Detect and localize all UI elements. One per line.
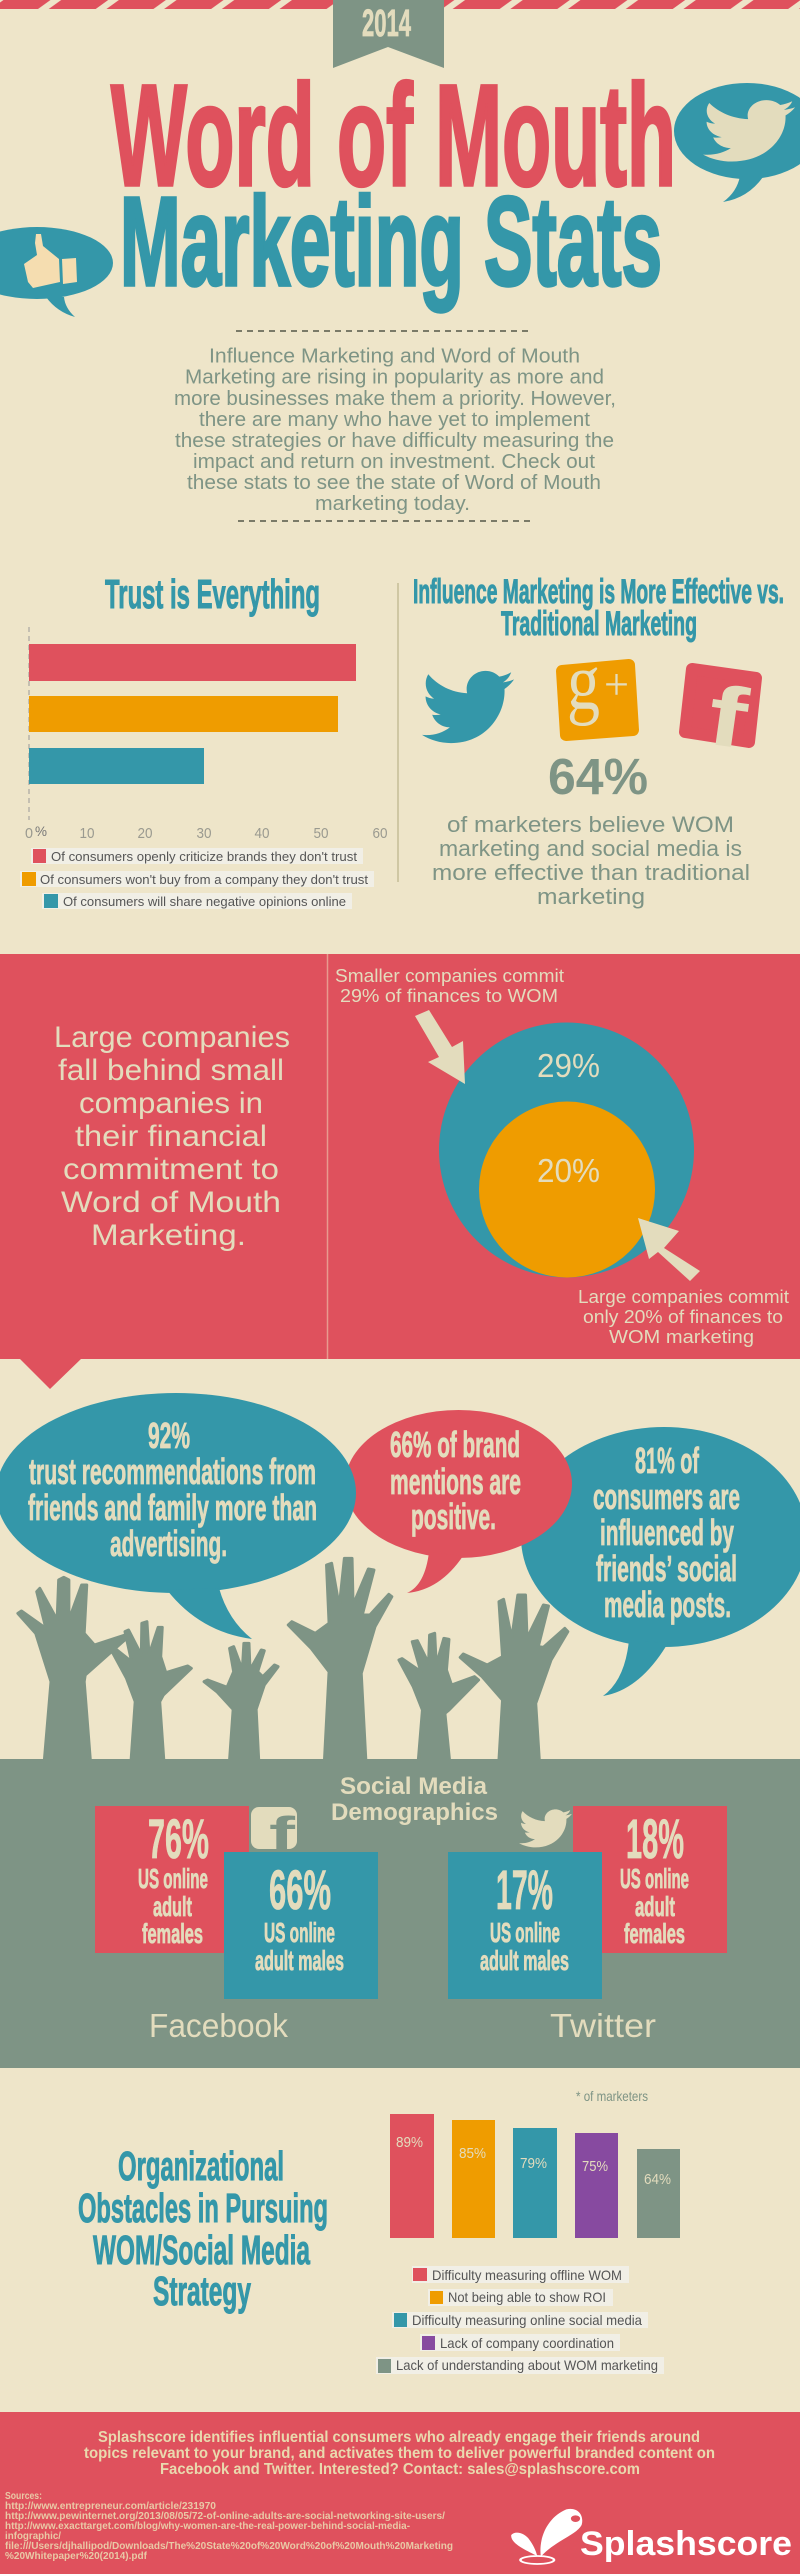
heading: organizational obstacles: Organizational (118, 2143, 284, 2189)
speech bubble: 92%: trust recommendations from (29, 1451, 316, 1492)
speech bubble: 92%: friends and family more than (28, 1487, 317, 1528)
heading: organizational obstacles: Strategy (153, 2268, 251, 2314)
year ribbon (333, 0, 444, 68)
text block: marketers believe: of marketers believe WOM (447, 812, 734, 837)
text block: marketers believe: marketing (537, 884, 645, 909)
stat: 64%: 64% (548, 748, 648, 805)
label: facebook: Facebook (149, 2007, 288, 2044)
panel: social media demographics (0, 1759, 800, 2068)
callout: smaller companies: 29% of finances to WOM (340, 986, 558, 1006)
icon: google plus: + (604, 660, 629, 709)
icon: facebook small (251, 1807, 297, 1859)
speech bubble: 66%: positive. (411, 1496, 496, 1537)
card: twitter females: adult (635, 1891, 675, 1922)
text: splashscore pitch (84, 2429, 715, 2478)
card: facebook females: females (142, 1918, 203, 1949)
arrow: to large circle (638, 1218, 700, 1281)
intro text block: more businesses make them a priority. However, (174, 388, 616, 410)
speech bubble: 66%: 66% of brand (390, 1424, 520, 1465)
chart: nested circles: 20% (537, 1152, 600, 1189)
legend: obstacles: Difficulty measuring offline WOM (432, 2267, 622, 2283)
icon: twitter speech bubble (674, 83, 800, 202)
text: large companies: commitment to (63, 1153, 279, 1186)
bar chart: trust: 30 (196, 825, 212, 842)
bar chart: trust: 10 (80, 825, 94, 842)
intro text block: there are many who have yet to implement (199, 409, 590, 431)
icon: facebook: f (702, 668, 754, 768)
card: facebook females: adult (153, 1891, 192, 1922)
text: splashscore pitch: Facebook and Twitter. Interested? Contact: sales@splashscore.com (160, 2461, 640, 2478)
text: splashscore pitch: topics relevant to your brand, and activates them to deliver powerful branded content on (84, 2445, 715, 2462)
card: facebook males (224, 1852, 378, 1999)
intro text block: these strategies or have difficulty measuring the (175, 430, 614, 452)
intro text block: these stats to see the state of Word of Mouth (187, 472, 601, 494)
illustration: raised hands (18, 1558, 568, 1760)
heading: social media demographics (331, 1773, 498, 1826)
heading: organizational obstacles (78, 2143, 328, 2314)
logo: splashscore: Splashscore (580, 2525, 792, 2563)
text block: marketers believe: marketing and social media is (439, 836, 742, 861)
callout: large companies: only 20% of finances to (583, 1307, 783, 1327)
callout: large companies: WOM marketing (609, 1327, 754, 1347)
bar chart: trust: 40 (254, 825, 270, 842)
legend: trust: Of consumers openly criticize brands they don't trust (51, 849, 357, 864)
text: large companies: Large companies (54, 1021, 290, 1054)
bar chart: obstacles: 75% (582, 2158, 608, 2175)
bar chart: trust: 50 (314, 825, 328, 842)
callout: large companies (578, 1287, 789, 1347)
callout: smaller companies: Smaller companies commit (335, 966, 564, 986)
panel: financial commitment (0, 954, 800, 1389)
text block: marketers believe (432, 812, 750, 909)
legend: obstacles: Difficulty measuring online social media (412, 2312, 642, 2328)
card: twitter males: 17% (496, 1858, 553, 1921)
chart: nested circles (439, 1022, 694, 1278)
text: sources: Sources: (5, 2491, 42, 2502)
card: twitter males: US online (490, 1917, 560, 1948)
legend: trust: Of consumers will share negative opinions online (63, 894, 346, 909)
text block: marketers believe: more effective than traditional (432, 860, 750, 885)
icon: google plus (562, 639, 633, 735)
text: sources (5, 2491, 453, 2562)
text: sources: file:///Users/djhallipod/Downloads/The%20State%20of%20Word%20of%20Mouth%20Marketing (5, 2541, 453, 2552)
bar chart: obstacles (390, 2114, 680, 2238)
speech bubble: 81% (521, 1427, 800, 1696)
speech bubble: 92% (0, 1393, 356, 1639)
bar chart: trust: 60 (372, 825, 388, 842)
speech bubble: 92%: 92% (148, 1415, 190, 1456)
card: twitter males (448, 1852, 602, 1999)
text: large companies: fall behind small (58, 1054, 284, 1087)
bar chart: trust (25, 627, 388, 842)
icon: thumbs-up speech bubble (0, 227, 113, 317)
intro text block (174, 346, 616, 515)
card: facebook males: adult males (255, 1945, 344, 1976)
note: of marketers: * of marketers (576, 2088, 648, 2104)
text: large companies: Marketing. (91, 1219, 246, 1252)
bar chart: trust: % (35, 823, 47, 839)
card: facebook females (95, 1806, 249, 1953)
callout: smaller companies (335, 966, 564, 1006)
card: facebook females: US online (138, 1863, 208, 1894)
icon: google plus: g (567, 639, 600, 727)
chart: nested circles: 29% (537, 1047, 600, 1084)
text: large companies: Word of Mouth (61, 1186, 281, 1219)
title (111, 55, 676, 312)
text: sources: infographic/ (5, 2531, 61, 2542)
icon: twitter small (519, 1809, 572, 1847)
text: sources: http://www.exacttarget.com/blog/why-women-are-the-real-power-behind-social-media- (5, 2521, 410, 2532)
bar chart: obstacles: 79% (520, 2155, 547, 2172)
bar chart: obstacles: 64% (644, 2171, 671, 2188)
speech bubble: 92%: advertising. (110, 1523, 227, 1564)
logo: splashscore (511, 2509, 792, 2564)
legend: obstacles: Not being able to show ROI (448, 2289, 606, 2305)
text: large companies: companies in (79, 1087, 263, 1120)
text: splashscore pitch: Splashscore identifies influential consumers who already engage their friends around (98, 2429, 700, 2446)
icon: twitter (422, 671, 514, 743)
intro text block: Marketing are rising in popularity as more and (185, 366, 604, 388)
legend: obstacles: Lack of company coordination (440, 2335, 614, 2351)
bar chart: obstacles: 89% (396, 2134, 423, 2151)
text: large companies (54, 1021, 290, 1252)
intro text block: marketing today. (315, 493, 470, 515)
heading: influence marketing (413, 573, 784, 643)
card: twitter females (573, 1806, 727, 1953)
bar chart: obstacles: 85% (459, 2145, 486, 2162)
card: twitter females: females (624, 1918, 685, 1949)
arrow: to small circle (415, 1010, 465, 1084)
legend: obstacles (376, 2266, 664, 2374)
text: sources: http://www.pewinternet.org/2013/08/05/72-of-online-adults-are-social-networking-site-users/ (5, 2511, 445, 2522)
card: twitter females: US online (620, 1863, 689, 1894)
panel: footer (0, 2412, 800, 2574)
legend: trust: Of consumers won't buy from a company they don't trust (40, 872, 368, 887)
text: large companies: their financial (75, 1120, 267, 1153)
heading: social media demographics: Social Media (340, 1773, 488, 1800)
intro text block: impact and return on investment. Check out (193, 451, 595, 473)
card: facebook males: US online (264, 1917, 335, 1948)
heading: organizational obstacles: Obstacles in Pursuing (78, 2185, 328, 2231)
speech bubble: 81%: 81% of (635, 1440, 700, 1481)
speech bubble: 66%: mentions are (390, 1461, 521, 1502)
callout: large companies: Large companies commit (578, 1287, 789, 1307)
card: facebook males: 66% (269, 1858, 331, 1921)
heading: social media demographics: Demographics (331, 1799, 498, 1826)
legend: trust (20, 848, 374, 909)
heading: organizational obstacles: WOM/Social Media (93, 2227, 311, 2273)
legend: obstacles: Lack of understanding about WOM marketing (396, 2357, 658, 2373)
card: twitter females: 18% (626, 1807, 684, 1870)
label: twitter: Twitter (550, 2007, 656, 2044)
bar chart: trust: 20 (138, 825, 152, 842)
intro text block: Influence Marketing and Word of Mouth (209, 346, 580, 368)
card: twitter males: adult males (480, 1945, 569, 1976)
bar chart: trust: 0 (25, 825, 33, 842)
speech bubble: 66% (345, 1410, 572, 1593)
text: sources: %20Whitepaper%20(2014).pdf (5, 2551, 148, 2562)
heading: trust is everything: Trust is Everything (105, 571, 320, 617)
year ribbon: 2014 (362, 3, 411, 45)
icon: facebook small: f (269, 1807, 296, 1859)
card: facebook females: 76% (148, 1807, 209, 1870)
icon: facebook (685, 668, 756, 768)
text: sources: http://www.entrepreneur.com/article/231970 (5, 2501, 216, 2512)
